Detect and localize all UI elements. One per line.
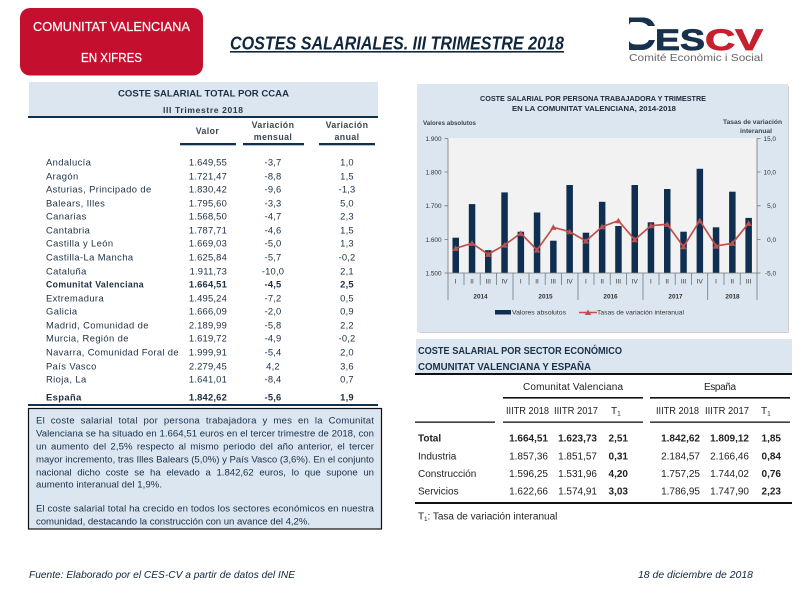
variación mensual column: -4,5 bbox=[265, 278, 281, 290]
column headings: Variación bbox=[252, 120, 294, 130]
column headings bbox=[180, 120, 375, 145]
row: Industria: 2.166,46 bbox=[710, 452, 749, 462]
region names: Canarias bbox=[46, 210, 87, 222]
text box: commentary: comunidad, destacando la construcción con un avance del 4,2%. bbox=[36, 516, 310, 528]
variación mensual column: -7,2 bbox=[265, 292, 281, 304]
valor column: 2.189,99 bbox=[189, 320, 227, 330]
row: Total: 2,51 bbox=[609, 434, 628, 444]
title: COSTES SALARIALES. III TRIMESTRE 2018 bbox=[230, 32, 565, 54]
chart title: COSTE SALARIAL POR PERSONA TRABAJADORA Y TRIMESTRE bbox=[480, 94, 706, 103]
valor column bbox=[189, 156, 227, 402]
region names: Madrid, Comunidad de bbox=[46, 320, 149, 330]
quarter labels: II bbox=[470, 278, 474, 286]
quarter labels: III bbox=[746, 278, 751, 286]
panel: chart of salary cost per worker bbox=[417, 84, 789, 333]
variación anual column: 2,2 bbox=[340, 320, 354, 330]
quarter labels bbox=[455, 278, 751, 286]
logo: CES-CV: ES bbox=[655, 24, 705, 57]
right axis labels: 5,0 bbox=[767, 203, 776, 210]
column headings: mensual bbox=[254, 132, 292, 142]
column headings: T bbox=[761, 406, 767, 417]
region names: Murcia, Región de bbox=[46, 332, 129, 344]
quarter labels: III bbox=[681, 278, 686, 286]
variación anual column: 3,6 bbox=[340, 360, 354, 372]
text box: commentary: mayor incremento, tras Illes Balears (5,0%) y País Vasco (3,6%). En el conjunto bbox=[36, 454, 374, 466]
badge: Comunitat Valenciana en xifres: COMUNITAT VALENCIANA bbox=[33, 19, 190, 34]
valor column: 1.641,01 bbox=[189, 374, 227, 384]
variación anual column: 2,5 bbox=[340, 278, 354, 290]
logo: CES-CV: CV bbox=[705, 24, 763, 57]
date: 18 de diciembre de 2018 bbox=[638, 569, 753, 581]
axis titles: interanual bbox=[740, 128, 772, 135]
panel: coste salarial por sector económico bbox=[415, 339, 792, 523]
row: Total: 1.809,12 bbox=[710, 434, 749, 444]
row: Industria: 2.184,57 bbox=[661, 452, 700, 462]
valor column: 1.911,73 bbox=[190, 266, 227, 276]
right axis labels: 15,0 bbox=[764, 136, 776, 143]
right axis labels: 10,0 bbox=[764, 170, 776, 176]
text box: commentary bbox=[28, 408, 382, 529]
row: Servicios: Servicios bbox=[418, 486, 459, 498]
legend bbox=[495, 310, 684, 316]
chart title bbox=[480, 94, 706, 113]
variación anual column: 1,3 bbox=[340, 238, 354, 248]
variación mensual column: -4,7 bbox=[265, 210, 281, 222]
row: Construcción bbox=[418, 469, 781, 480]
valor column: 1.625,84 bbox=[189, 252, 227, 262]
row: Construcción: 1.531,96 bbox=[558, 469, 597, 480]
column headings: 1 bbox=[617, 410, 621, 418]
right axis labels: 0,0 bbox=[767, 237, 776, 244]
variación anual column: 1,5 bbox=[340, 224, 354, 236]
table footnote: : Tasa de variación interanual bbox=[427, 512, 557, 522]
variación mensual column: -4,9 bbox=[265, 332, 281, 344]
badge: Comunitat Valenciana en xifres: EN XIFRES bbox=[81, 50, 142, 65]
row: Servicios: 1.747,90 bbox=[710, 486, 749, 498]
variación anual column: -0,2 bbox=[339, 332, 355, 344]
variación anual column: 5,0 bbox=[340, 198, 354, 208]
quarter labels: II bbox=[600, 278, 604, 286]
column headings: IIITR 2018 bbox=[506, 406, 549, 417]
quarter labels: IV bbox=[567, 278, 573, 286]
variación mensual column: -9,6 bbox=[265, 184, 281, 194]
row: Servicios: 1.622,66 bbox=[509, 486, 548, 498]
region names: Castilla y León bbox=[46, 238, 114, 248]
text box: commentary: un aumento del 2,5% respecto al mismo periodo del año anterior, el tercer bbox=[36, 442, 375, 452]
region names bbox=[46, 156, 179, 402]
region names: Castilla-La Mancha bbox=[46, 252, 134, 262]
row: Total bbox=[418, 434, 781, 444]
row: Construcción: 1.757,25 bbox=[661, 469, 700, 480]
region names: Extremadura bbox=[46, 292, 104, 304]
quarter labels: III bbox=[486, 278, 491, 286]
row: Construcción: Construcción bbox=[418, 469, 476, 480]
region names: Andalucía bbox=[46, 156, 92, 168]
row: Industria: 1.851,57 bbox=[558, 452, 597, 462]
row: Servicios bbox=[418, 486, 781, 498]
row: Total: 1.623,73 bbox=[558, 434, 597, 444]
left axis labels: 1.600 bbox=[426, 237, 442, 244]
variación anual column bbox=[339, 156, 355, 402]
row: Servicios: 1.786,95 bbox=[661, 486, 700, 498]
table header: III Trimestre 2018 bbox=[163, 105, 243, 115]
region names: Cataluña bbox=[46, 266, 87, 276]
left axis labels: 1.900 bbox=[426, 136, 442, 143]
quarter labels: III bbox=[616, 278, 621, 286]
variación mensual column: -3,7 bbox=[265, 156, 281, 168]
row: Servicios: 2,23 bbox=[762, 486, 781, 498]
row: Total: 1,85 bbox=[762, 434, 781, 444]
column headings: 1 bbox=[767, 410, 771, 418]
quarter labels: III bbox=[551, 278, 556, 286]
row: Industria: Industria bbox=[418, 452, 457, 462]
region names: Navarra, Comunidad Foral de bbox=[46, 346, 179, 358]
text box: commentary: El coste salarial total ha crecido en todos los sectores económicos en nuestra bbox=[36, 504, 375, 514]
quarter labels: IV bbox=[632, 278, 638, 286]
variación anual column: 1,5 bbox=[340, 170, 354, 182]
text box: commentary: Valenciana se ha situado en 1.664,51 euros en el tercer trimestre de 2018, con bbox=[36, 428, 374, 440]
axis titles: Valores absolutos bbox=[423, 120, 476, 127]
variación anual column: 0,5 bbox=[340, 292, 354, 304]
column headings: anual bbox=[335, 132, 359, 142]
variación mensual column: -8,4 bbox=[265, 374, 281, 384]
variación mensual column: -5,6 bbox=[265, 392, 281, 402]
variación anual column: -1,3 bbox=[339, 184, 355, 194]
left axis labels bbox=[426, 136, 442, 278]
axes and ticks bbox=[444, 138, 760, 300]
variación anual column: 2,3 bbox=[340, 210, 354, 222]
left axis labels: 1.800 bbox=[426, 170, 442, 176]
row: Industria: 0,84 bbox=[762, 452, 781, 462]
region names: Asturias, Principado de bbox=[46, 184, 152, 194]
valor column: 1.666,09 bbox=[189, 306, 227, 316]
bars: valores absolutos bbox=[452, 169, 752, 273]
row: Construcción: 1.744,02 bbox=[710, 469, 749, 480]
row: Construcción: 0,76 bbox=[762, 469, 781, 480]
row: Construcción: 1.596,25 bbox=[509, 469, 548, 480]
legend: Valores absolutos bbox=[512, 310, 566, 316]
column headings: Variación bbox=[326, 120, 368, 130]
row: Industria: 0,31 bbox=[609, 452, 628, 462]
variación mensual column: -5,4 bbox=[265, 346, 281, 358]
quarter labels: II bbox=[731, 278, 734, 286]
line: tasas de variación interanual bbox=[456, 221, 749, 254]
table header: COSTE SALARIAL TOTAL POR CCAA bbox=[118, 88, 289, 100]
badge: Comunitat Valenciana en xifres bbox=[20, 8, 203, 76]
sector table heading: COMUNITAT VALENCIANA Y ESPAÑA bbox=[418, 360, 591, 373]
region names: Comunitat Valenciana bbox=[46, 278, 144, 290]
column headings: IIITR 2017 bbox=[554, 406, 598, 417]
variación mensual column: -5,8 bbox=[265, 320, 281, 330]
valor column: 1.669,03 bbox=[189, 238, 227, 248]
variación mensual column: -10,0 bbox=[262, 266, 284, 276]
row: Total: 1.664,51 bbox=[509, 434, 548, 444]
quarter labels: I bbox=[650, 278, 652, 286]
quarter labels: I bbox=[715, 278, 717, 286]
sector table heading: COSTE SALARIAL POR SECTOR ECONÓMICO bbox=[418, 344, 622, 357]
group headings: Comunitat Valenciana bbox=[523, 382, 623, 393]
valor column: 2.279,45 bbox=[189, 360, 227, 372]
quarter labels: IV bbox=[501, 278, 508, 286]
variación mensual column bbox=[262, 156, 284, 402]
year labels: 2016 bbox=[603, 294, 618, 300]
quarter labels: II bbox=[665, 278, 669, 286]
variación anual column: 2,0 bbox=[340, 346, 354, 358]
region names: Galicia bbox=[46, 306, 78, 316]
region names: Cantabria bbox=[46, 224, 91, 236]
region names: País Vasco bbox=[46, 360, 97, 372]
variación anual column: 1,0 bbox=[340, 156, 354, 168]
axis titles: Tasas de variación bbox=[723, 119, 782, 126]
year labels bbox=[473, 294, 740, 300]
valor column: 1.664,51 bbox=[189, 278, 227, 290]
valor column: 1.568,50 bbox=[189, 210, 227, 222]
left axis labels: 1.500 bbox=[426, 270, 442, 278]
variación mensual column: -8,8 bbox=[265, 170, 281, 182]
quarter labels: I bbox=[455, 278, 457, 286]
valor column: 1.999,91 bbox=[189, 346, 227, 358]
row: Construcción: 4,20 bbox=[609, 469, 628, 480]
column headings: IIITR 2018 bbox=[656, 406, 699, 417]
column headings bbox=[415, 406, 790, 423]
variación anual column: 0,9 bbox=[340, 306, 354, 316]
valor column: 1.787,71 bbox=[189, 224, 227, 236]
axis titles bbox=[423, 119, 782, 135]
plot background bbox=[448, 138, 757, 273]
valor column: 1.721,47 bbox=[189, 170, 227, 182]
variación mensual column: 4,2 bbox=[266, 360, 280, 372]
panel: coste salarial total por CCAA bbox=[28, 82, 378, 406]
source note: Fuente: Elaborado por el CES-CV a partir de datos del INE bbox=[29, 569, 296, 581]
row: Servicios: 1.574,91 bbox=[558, 486, 597, 498]
chart title: EN LA COMUNITAT VALENCIANA, 2014-2018 bbox=[512, 104, 676, 113]
text box: commentary: aumento interanual del 1,9%. bbox=[36, 480, 162, 490]
valor column: 1.830,42 bbox=[189, 184, 227, 194]
variación mensual column: -2,0 bbox=[265, 306, 281, 316]
table header bbox=[28, 82, 378, 118]
sector table heading bbox=[415, 339, 792, 375]
variación mensual column: -5,0 bbox=[265, 238, 281, 248]
table footnote: T bbox=[418, 512, 424, 522]
variación mensual column: -4,6 bbox=[265, 224, 281, 236]
quarter labels: I bbox=[520, 278, 522, 286]
column headings: Valor bbox=[196, 126, 219, 136]
region names: Rioja, La bbox=[46, 374, 87, 384]
row: Total: Total bbox=[418, 434, 441, 444]
table footnote: 1 bbox=[424, 517, 428, 523]
logo: CES-CV bbox=[629, 18, 763, 64]
variación anual column: 0,7 bbox=[340, 374, 354, 384]
right axis labels bbox=[764, 136, 776, 278]
column headings: IIITR 2017 bbox=[705, 406, 749, 417]
quarter labels: II bbox=[535, 278, 539, 286]
variación mensual column: -3,3 bbox=[265, 198, 281, 208]
valor column: 1.619,72 bbox=[189, 332, 227, 344]
variación anual column: 2,1 bbox=[340, 266, 354, 276]
column headings: T bbox=[611, 406, 617, 417]
row: Total: 1.842,62 bbox=[661, 434, 700, 444]
region names: España bbox=[46, 392, 82, 402]
row: Industria: 1.857,36 bbox=[509, 452, 548, 462]
valor column: 1.649,55 bbox=[189, 156, 227, 168]
group headings: España bbox=[704, 382, 736, 393]
variación anual column: -0,2 bbox=[339, 252, 355, 262]
quarter labels: IV bbox=[697, 278, 704, 286]
year labels: 2017 bbox=[668, 294, 683, 300]
text box: commentary: nacional dicho coste se ha elevado a 1.842,62 euros, lo que supone un bbox=[36, 468, 374, 478]
quarter labels: I bbox=[585, 278, 587, 286]
variación anual column: 1,9 bbox=[340, 392, 354, 402]
legend: Tasas de variación interanual bbox=[597, 310, 684, 316]
group headings bbox=[503, 382, 790, 399]
row: Servicios: 3,03 bbox=[609, 486, 628, 498]
year labels: 2015 bbox=[538, 294, 553, 300]
logo: CES-CV: Comité Econòmic i Social bbox=[629, 52, 763, 64]
year labels: 2014 bbox=[473, 294, 488, 300]
year labels: 2018 bbox=[725, 294, 740, 300]
text box: commentary: El coste salarial total por persona trabajadora y mes en la Comunitat bbox=[36, 416, 374, 426]
row: Industria bbox=[418, 452, 781, 462]
valor column: 1.842,62 bbox=[189, 392, 227, 402]
region names: Balears, Illes bbox=[46, 198, 105, 208]
left axis labels: 1.700 bbox=[426, 203, 442, 210]
valor column: 1.495,24 bbox=[189, 292, 227, 304]
variación mensual column: -5,7 bbox=[265, 252, 281, 262]
valor column: 1.795,60 bbox=[189, 198, 227, 208]
right axis labels: -5,0 bbox=[765, 270, 776, 278]
region names: Aragón bbox=[46, 170, 79, 182]
